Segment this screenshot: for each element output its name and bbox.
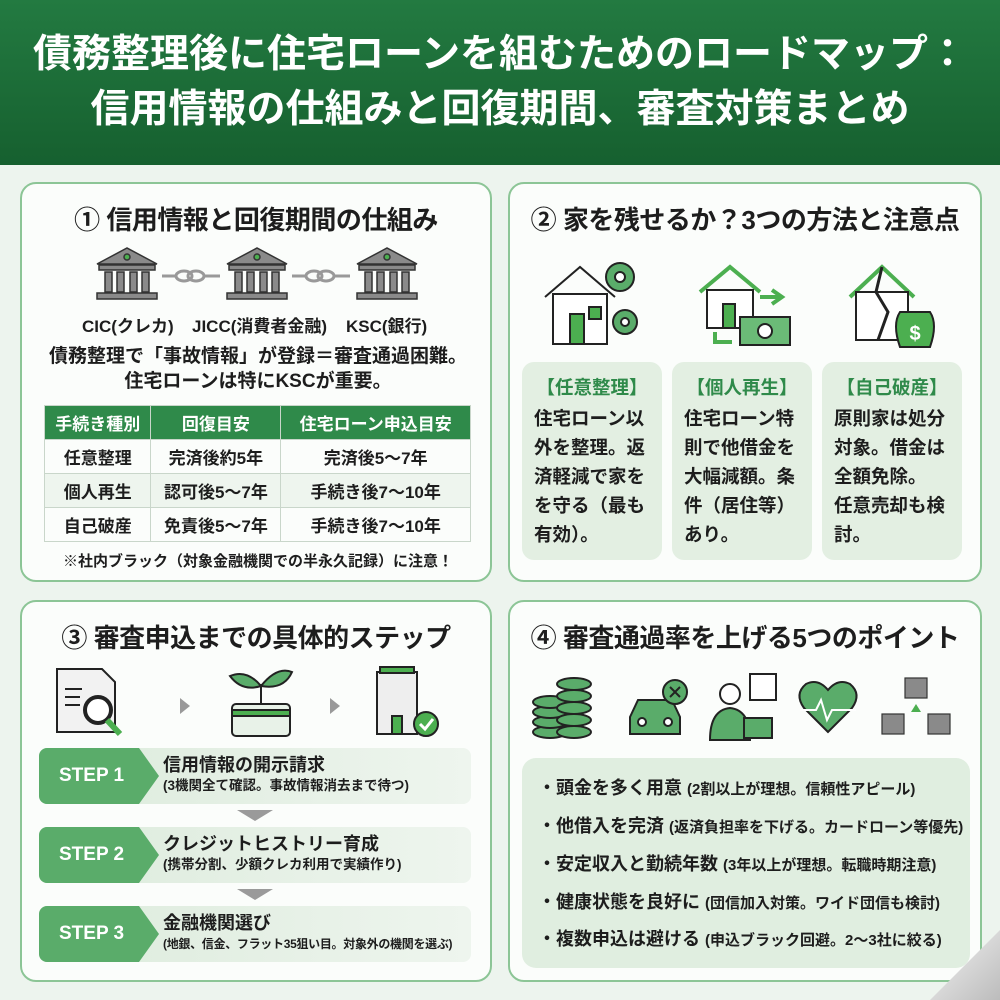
page curl	[930, 930, 1000, 1000]
step 3: (地銀、信金、フラット35狙い目。対象外の機関を選ぶ)	[163, 937, 452, 951]
header banner	[0, 0, 1000, 165]
panel: five points	[508, 600, 982, 982]
bank labels	[82, 317, 427, 336]
step 1: (3機関全て確認。事故情報消去まで待つ)	[163, 778, 409, 793]
table: recovery periods: 手続き種別	[55, 415, 140, 434]
point 1: ・頭金を多く用意 (2割以上が理想。信頼性アピール)	[538, 778, 915, 798]
point 4: ・健康状態を良好に (団信加入対策。ワイド団信も検討)	[538, 892, 940, 912]
point 3: ・安定収入と勤続年数 (3年以上が理想。転職時期注意)	[538, 854, 936, 874]
box: 個人再生: 【個人再生】	[686, 377, 798, 398]
table: recovery periods: 回復目安	[182, 415, 250, 434]
icons: houses	[544, 262, 935, 348]
box: 自己破産: 全額免除。	[834, 466, 927, 487]
table: recovery periods: 完済後5～7年	[324, 449, 428, 468]
step 1	[39, 748, 471, 804]
panel: steps	[20, 600, 492, 982]
box: 個人再生: 則で他借金を	[684, 437, 795, 458]
panel: credit info: KSC(銀行)	[346, 317, 427, 336]
explanation text	[49, 346, 467, 392]
step 2: STEP 2	[59, 844, 124, 865]
title	[33, 33, 967, 131]
explanation text: 住宅ローンは特にKSCが重要。	[124, 371, 392, 392]
step 2: クレジットヒストリー育成	[163, 834, 379, 854]
box: 任意整理: を守る（最も	[534, 495, 645, 516]
step 3: STEP 3	[59, 923, 124, 944]
icons: banks chain	[96, 247, 418, 300]
table: recovery periods: 免責後5～7年	[164, 517, 268, 536]
box: 自己破産: 【自己破産】	[836, 377, 948, 398]
icons: five points	[532, 673, 951, 741]
panel: credit info: JICC(消費者金融)	[192, 317, 327, 336]
explanation text: 債務整理で「事故情報」が登録＝審査通過困難。	[49, 346, 467, 367]
heading 3: ③ 審査申込までの具体的ステップ	[61, 623, 451, 653]
list box	[522, 758, 970, 968]
box: 自己破産: 対象。借金は	[834, 437, 945, 458]
table: recovery periods: 完済後約5年	[169, 449, 263, 468]
title: 信用情報の仕組みと回復期間、審査対策まとめ	[90, 88, 910, 131]
table: recovery periods: 任意整理	[64, 449, 132, 468]
icons: houses: $	[909, 323, 921, 345]
step 3	[39, 906, 471, 962]
note: ※社内ブラック（対象金融機関での半永久記録）に注意！	[63, 553, 453, 570]
step 1: 信用情報の開示請求	[163, 755, 325, 775]
box: 任意整理: 【任意整理】	[536, 377, 648, 398]
box: 自己破産: 原則家は処分	[834, 408, 945, 429]
step 2: (携帯分割、少額クレカ利用で実績作り)	[163, 857, 402, 872]
table: recovery periods: 住宅ローン申込目安	[300, 415, 452, 434]
box: 任意整理: 済軽減で家を	[534, 466, 645, 487]
panel: credit info: CIC(クレカ)	[82, 317, 174, 336]
heading 1: ① 信用情報と回復期間の仕組み	[74, 205, 438, 235]
box: 任意整理: 住宅ローン以	[534, 408, 644, 429]
heading 2: ② 家を残せるか？3つの方法と注意点	[531, 205, 959, 235]
step 2	[39, 827, 471, 883]
table: recovery periods: 個人再生	[64, 483, 132, 502]
box: 個人再生: 住宅ローン特	[684, 408, 794, 429]
table: recovery periods	[44, 405, 471, 542]
point 2: ・他借入を完済 (返済負担率を下げる。カードローン等優先)	[538, 816, 963, 836]
box: 個人再生: 件（居住等）	[684, 495, 795, 516]
heading 4: ④ 審査通過率を上げる5つのポイント	[531, 623, 959, 653]
step 3: 金融機関選び	[163, 913, 271, 933]
table: recovery periods: 手続き後7～10年	[310, 517, 441, 536]
box: 個人再生: 大幅減額。条	[684, 466, 795, 487]
panel: three methods	[508, 182, 982, 582]
point 5: ・複数申込は避ける (申込ブラック回避。2～3社に絞る)	[538, 929, 942, 949]
box: 自己破産: 討。	[834, 524, 871, 545]
icons: steps	[56, 666, 439, 737]
box: 任意整理: 外を整理。返	[534, 437, 645, 458]
table: recovery periods: 自己破産	[64, 517, 132, 536]
box: 個人再生	[672, 362, 812, 560]
box: 任意整理	[522, 362, 662, 560]
box: 自己破産	[822, 362, 962, 560]
box: 自己破産: 任意売却も検	[834, 495, 945, 516]
title: 債務整理後に住宅ローンを組むためのロードマップ：	[33, 33, 967, 76]
step 1: STEP 1	[59, 765, 124, 786]
box: 任意整理: 有効）。	[534, 524, 599, 545]
table: recovery periods: 手続き後7～10年	[310, 483, 441, 502]
box: 個人再生: あり。	[684, 524, 739, 545]
panel: credit info	[20, 182, 492, 582]
table: recovery periods: 認可後5～7年	[164, 483, 268, 502]
